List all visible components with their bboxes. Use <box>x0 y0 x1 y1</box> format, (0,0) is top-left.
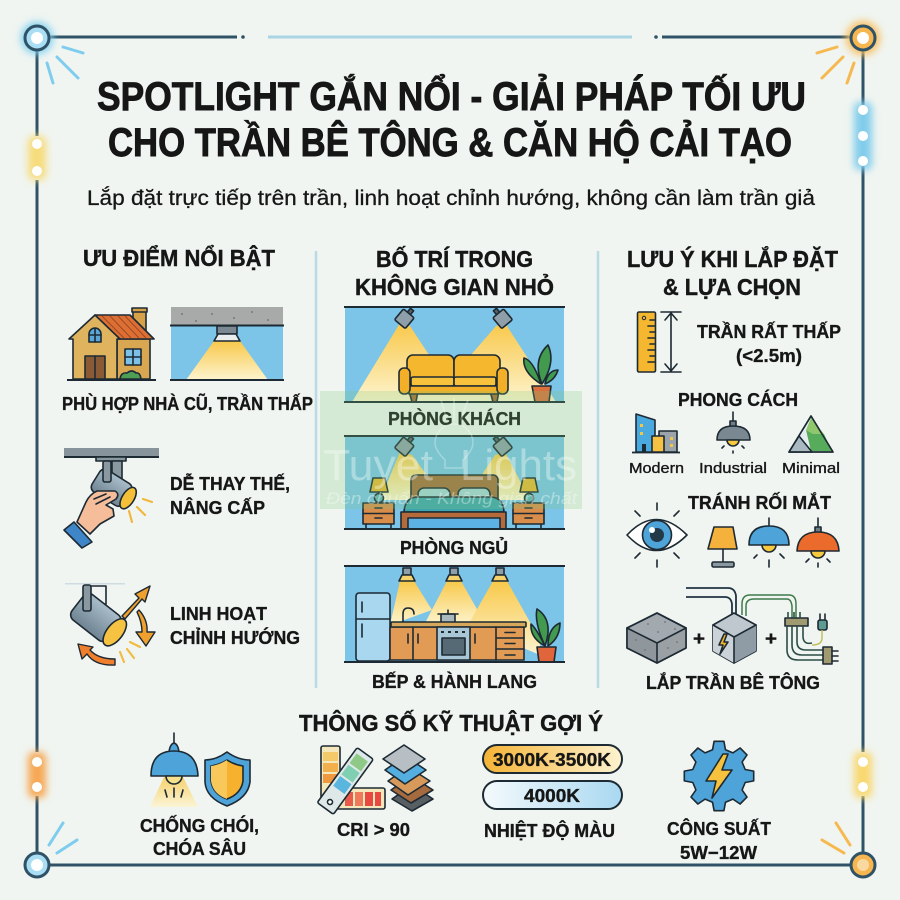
label: lắp trần bê tông: LẮP TRẦN BÊ TÔNG <box>646 672 820 693</box>
label: chống chói: CHỐNG CHÓI, <box>140 815 259 836</box>
room: phòng ngủ <box>344 433 565 529</box>
icon: sofa <box>399 355 508 402</box>
pill: 3000K-3500K <box>483 745 622 773</box>
icon: kitchen counter <box>390 608 526 660</box>
icon: gear with bolt <box>684 741 754 811</box>
label: minimal: Minimal <box>782 460 840 477</box>
label: trần rất thấp: (<2.5m) <box>736 345 802 366</box>
icon: concrete mount kit: + <box>765 629 777 650</box>
icon: shield <box>205 752 250 806</box>
room: bếp và hành lang <box>344 566 565 662</box>
icon: eye <box>627 503 687 567</box>
label: phù hợp: PHÙ HỢP NHÀ CŨ, TRẦN THẤP <box>62 393 313 414</box>
icon: colour swatches <box>317 746 385 814</box>
title: SPOTLIGHT GẮN NỔI - GIẢI PHÁP TỐI ƯU <box>97 72 806 119</box>
label: trần rất thấp: TRẦN RẤT THẤP <box>697 321 841 342</box>
heading: phong cách: PHONG CÁCH <box>678 389 798 410</box>
panel: ưu điểm nổi bật <box>62 244 313 665</box>
label: công suất: CÔNG SUẤT <box>667 818 772 839</box>
label: bếp và hành lang: BẾP & HÀNH LANG <box>372 671 537 692</box>
heading: lưu ý: & LỰA CHỌN <box>663 274 801 300</box>
label: phòng khách: PHÒNG KHÁCH <box>388 408 521 429</box>
icon: adjustable spotlight <box>65 583 155 665</box>
pill: 3000K-3500K: 3000K-3500K <box>493 749 612 770</box>
icon: low ceiling spotlight <box>170 307 284 380</box>
heading: ưu điểm: ƯU ĐIỂM NỔI BẬT <box>83 244 275 271</box>
label: linh hoạt <box>170 603 300 648</box>
label: cri: CRI > 90 <box>337 819 410 840</box>
icon: nightstand left <box>363 478 394 528</box>
icon: blue pendant <box>749 518 789 567</box>
label: chống chói: CHÓA SÂU <box>153 838 246 859</box>
watermark: Tuyet <box>323 441 433 490</box>
heading: lưu ý: LƯU Ý KHI LẮP ĐẶT <box>627 245 838 272</box>
heading: bố trí: KHÔNG GIAN NHỎ <box>355 272 554 300</box>
icon: orange pendant <box>797 518 839 567</box>
panel: bố trí trong không gian nhỏ <box>344 245 565 692</box>
heading: tránh rối mắt: TRÁNH RỐI MẮT <box>688 492 832 513</box>
icon: modern buildings <box>632 414 680 452</box>
icon: nightstand right <box>513 478 544 528</box>
heading: lưu ý <box>627 245 838 300</box>
subtitle: Lắp đặt trực tiếp trên trần, linh hoạt chỉnh hướng, không cần làm trần giả <box>87 185 815 210</box>
icon: concrete mount kit <box>627 588 838 664</box>
label: chống chói <box>140 815 259 859</box>
icon: old house <box>67 308 156 380</box>
label: phòng ngủ: PHÒNG NGỦ <box>400 537 508 558</box>
icon: fridge <box>356 593 390 661</box>
panel: thông số kỹ thuật gợi ý <box>140 709 772 863</box>
watermark: Lights <box>460 441 577 490</box>
icon: industrial lamp <box>717 412 750 453</box>
title <box>97 72 806 165</box>
label: modern: Modern <box>629 460 684 477</box>
watermark <box>320 391 582 509</box>
label: dễ thay thế: DỄ THAY THẾ, <box>170 473 290 494</box>
icon: bed <box>401 475 506 529</box>
pill: 4000K <box>483 781 622 809</box>
heading: bố trí <box>355 245 554 300</box>
label: dễ thay thế: NÂNG CẤP <box>170 497 265 518</box>
icon: hand replacing spotlight <box>64 448 159 548</box>
icon: table lamp <box>708 527 737 567</box>
icon: minimal mountains <box>789 416 833 452</box>
panel: lưu ý khi lắp đặt <box>627 245 841 693</box>
icon: concrete mount kit: + <box>693 629 705 650</box>
room: phòng khách <box>344 305 565 402</box>
watermark: Đèn chuẩn - Không gian chất <box>326 489 578 508</box>
label: nhiệt độ màu: NHIỆT ĐỘ MÀU <box>484 820 615 841</box>
label: trần rất thấp <box>697 321 841 366</box>
label: linh hoạt: LINH HOẠT <box>170 603 268 624</box>
heading: thông số: THÔNG SỐ KỸ THUẬT GỢI Ý <box>299 709 603 736</box>
label: industrial: Industrial <box>699 460 767 477</box>
label: dễ thay thế <box>170 473 290 518</box>
icon: plant <box>524 345 558 402</box>
label: linh hoạt: CHỈNH HƯỚNG <box>170 627 300 648</box>
icon: material layers <box>383 745 433 811</box>
icon: kitchen plant <box>531 609 560 662</box>
icon: ruler and height arrow <box>638 312 681 372</box>
title: CHO TRẦN BÊ TÔNG & CĂN HỘ CẢI TẠO <box>108 119 792 165</box>
heading: bố trí: BỐ TRÍ TRONG <box>376 245 533 272</box>
icon: anti-glare pendant <box>150 733 198 807</box>
label: công suất: 5W−12W <box>680 842 758 863</box>
pill: 4000K: 4000K <box>524 785 581 806</box>
label: công suất <box>667 818 772 863</box>
